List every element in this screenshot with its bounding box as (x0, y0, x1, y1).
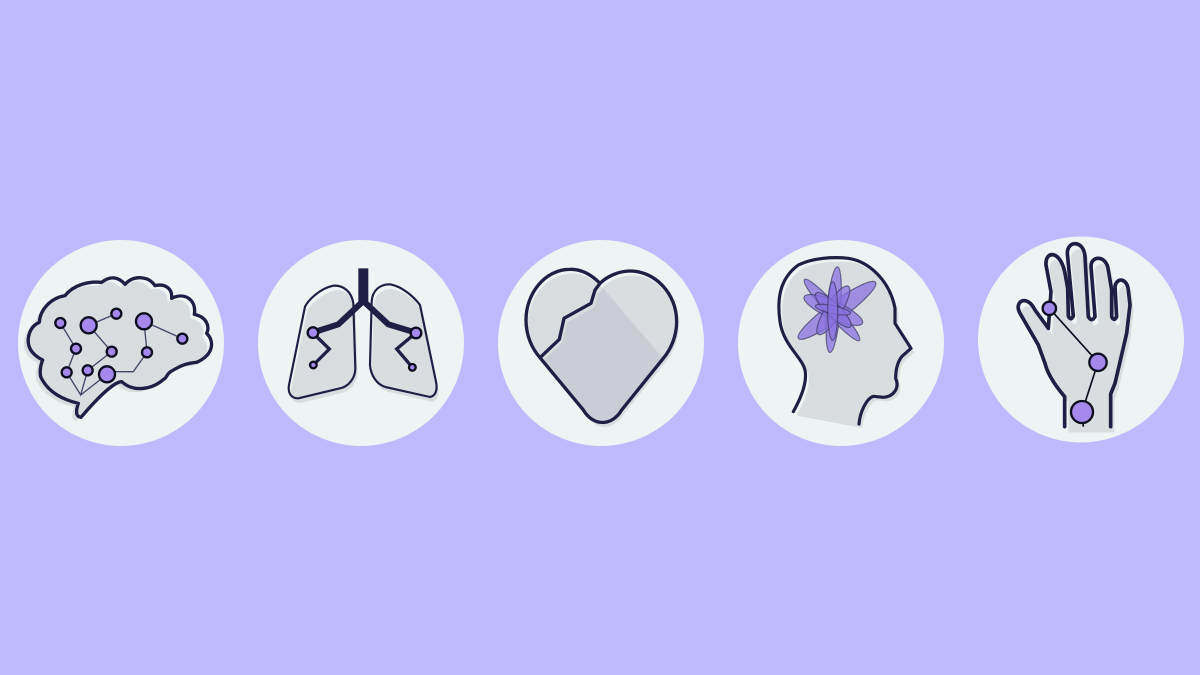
heart outline and crack (526, 269, 677, 422)
panel: lungs icon (258, 240, 464, 446)
heart darker facet (544, 288, 662, 421)
neural network connections (60, 314, 182, 395)
joint connections (1049, 308, 1098, 427)
head outline (779, 258, 911, 424)
airways (313, 268, 416, 367)
lungs shadow fill (291, 289, 439, 403)
panel: head icon (738, 240, 944, 446)
panel: hand icon (978, 236, 1184, 442)
brain shadow fill (24, 281, 207, 421)
panel: broken heart icon (498, 240, 704, 446)
joint nodes (1043, 302, 1107, 423)
hand shadow fill (1022, 249, 1134, 432)
airway nodes (308, 327, 421, 371)
lungs outline (289, 284, 437, 398)
heart shadow fill (528, 274, 679, 427)
brain outline (28, 278, 212, 417)
head shadow fill (782, 262, 914, 428)
starburst petals (793, 266, 881, 353)
hand outline (1018, 244, 1130, 427)
panel: brain icon (18, 240, 224, 446)
neural network nodes (55, 309, 187, 382)
